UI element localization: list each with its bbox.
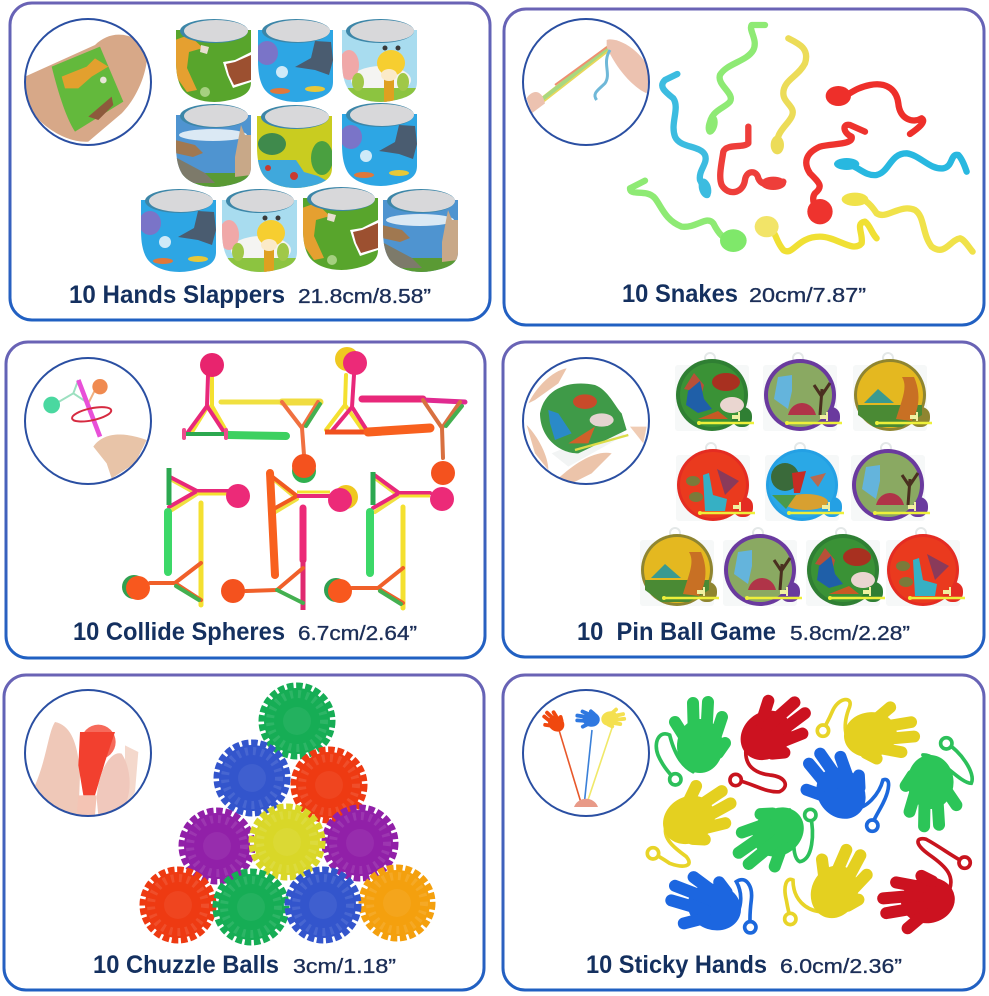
caption: hands slappers: 21.8cm/8.58”	[298, 286, 431, 308]
icon: three sticky hands on strings	[523, 690, 649, 816]
caption: sticky hands: 6.0cm/2.36”	[780, 956, 902, 978]
icon: stretched snake	[523, 19, 650, 145]
caption: snakes: 20cm/7.87”	[749, 285, 866, 307]
panel: pin ball game	[503, 342, 984, 657]
snakes	[630, 25, 973, 252]
icon: pin ball in hands	[523, 358, 649, 484]
panel: snakes	[504, 9, 984, 325]
caption: snakes: 10 Snakes	[622, 280, 738, 308]
caption: pin ball game: 10 Pin Ball Game	[577, 618, 776, 646]
chuzzle balls	[143, 686, 432, 942]
icon: spinning toy in hand	[25, 358, 151, 484]
caption: chuzzle balls: 3cm/1.18”	[293, 956, 396, 978]
sticky hands	[647, 688, 972, 939]
caption: collide spheres: 6.7cm/2.64”	[298, 623, 417, 645]
pin ball games	[640, 353, 965, 606]
caption: collide spheres: 10 Collide Spheres	[73, 618, 285, 646]
icon: slapper on wrist	[25, 19, 151, 145]
icon: ball squeezed in fingers	[25, 690, 151, 819]
caption: sticky hands: 10 Sticky Hands	[586, 951, 767, 979]
caption: pin ball game: 5.8cm/2.28”	[790, 623, 910, 645]
caption: chuzzle balls: 10 Chuzzle Balls	[93, 951, 279, 979]
panel: chuzzle balls	[4, 675, 484, 990]
caption: hands slappers: 10 Hands Slappers	[69, 281, 285, 309]
collide sphere toys	[122, 347, 465, 610]
panel: collide spheres	[6, 342, 485, 658]
panel: sticky hands	[503, 675, 984, 990]
slap bracelets	[139, 19, 459, 274]
panel: hands slappers	[10, 3, 490, 320]
